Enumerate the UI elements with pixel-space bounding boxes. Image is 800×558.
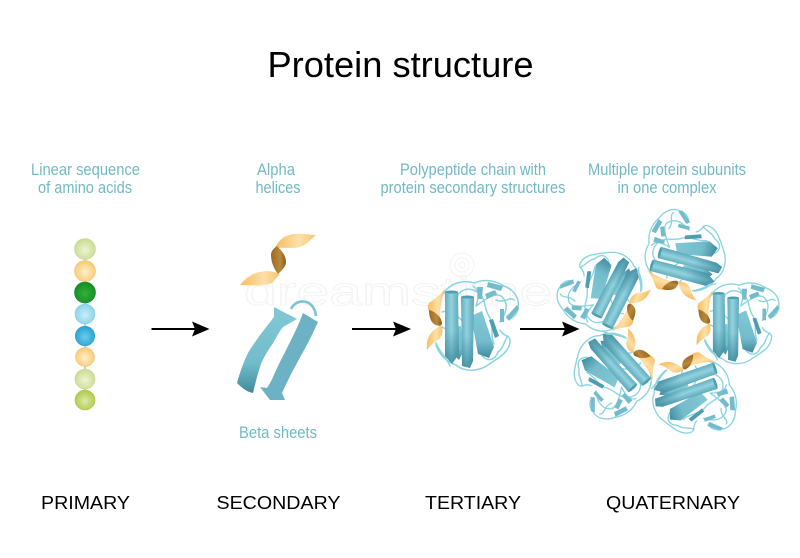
label: polypeptide chain: protein secondary structures — [380, 178, 566, 197]
alpha helix — [240, 234, 316, 286]
label: linear sequence — [31, 160, 140, 197]
label: multiple subunits: Multiple protein subunits — [588, 160, 746, 179]
label: alpha helices: helices — [256, 178, 300, 197]
label: polypeptide chain: Polypeptide chain with — [400, 160, 546, 179]
label: linear sequence: of amino acids — [38, 178, 132, 197]
watermark: dreamstime — [244, 270, 552, 314]
label: alpha helices: Alpha — [257, 160, 295, 179]
arrow 3 — [520, 322, 580, 336]
tertiary structure — [427, 280, 519, 370]
label: tertiary: TERTIARY — [425, 493, 521, 513]
label: linear sequence: Linear sequence — [31, 160, 140, 179]
arrow 1 — [152, 322, 210, 336]
label: polypeptide chain — [380, 160, 566, 197]
amino acid chain — [74, 238, 96, 410]
label: primary: PRIMARY — [41, 493, 130, 513]
watermark — [244, 253, 552, 314]
label: beta sheets: Beta sheets — [239, 423, 317, 442]
label: multiple subunits — [588, 160, 746, 197]
quaternary structure — [549, 204, 780, 449]
label: secondary: SECONDARY — [216, 493, 340, 513]
label: quaternary: QUATERNARY — [606, 493, 740, 513]
label: alpha helices — [256, 160, 300, 197]
arrow 2 — [352, 322, 411, 336]
beta sheets — [237, 301, 318, 400]
title: Protein structure — [268, 44, 534, 85]
label: multiple subunits: in one complex — [618, 178, 717, 197]
